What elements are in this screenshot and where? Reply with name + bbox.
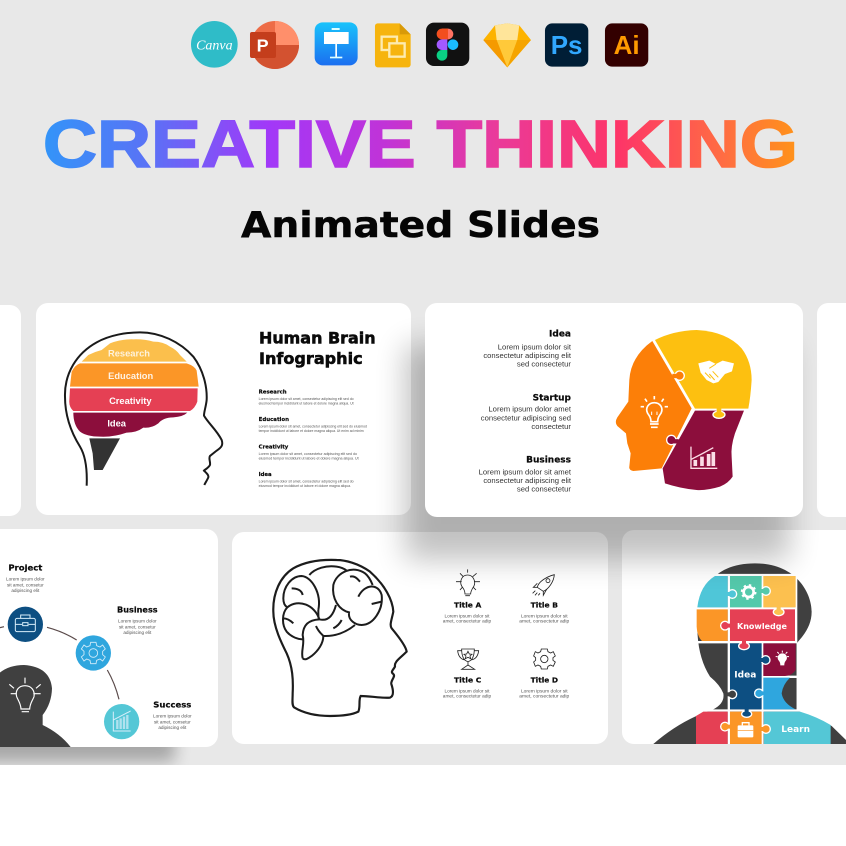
text: business: sed consectetur [517, 485, 571, 494]
text block: education: Education [259, 417, 289, 423]
text: idea: sed consectetur [517, 360, 571, 369]
piece: gear teal [730, 576, 762, 607]
text: project: Lorem ipsum dolor [6, 577, 45, 582]
text: title A: Lorem ipsum dolor sit [444, 613, 490, 618]
brain layer: creativity: Creativity [109, 396, 152, 406]
connector arrow [47, 627, 77, 640]
text block: education [259, 417, 367, 433]
dark silhouette [653, 563, 846, 744]
heading: Infographic [259, 349, 363, 368]
head outline [273, 560, 407, 716]
text: title D: Lorem ipsum dolor sit [521, 688, 569, 693]
text: project: Project [8, 564, 43, 573]
text: title C: amet, consectetur adip [443, 694, 492, 699]
text: startup: consectetur adipiscing sed [481, 413, 571, 422]
text block: education: tempor incididunt ut labore et dolore magna aliqua. Ut enim ad minim [259, 429, 364, 433]
icon: chart circle [104, 704, 139, 739]
panel: human brain infographic [36, 303, 411, 515]
panel: project business success [0, 529, 218, 747]
heading [259, 328, 376, 368]
text: project: sit amet, consetur [7, 582, 44, 587]
brain layer: education: Education [108, 371, 153, 381]
brain outline [283, 566, 382, 659]
brain layer: research: Research [108, 349, 150, 359]
icon: Canva [191, 21, 238, 68]
piece: idea: Idea [734, 671, 756, 681]
icon: PowerPoint: P [257, 36, 269, 56]
text: project [6, 564, 45, 593]
text: idea: consectetur adipiscing elit [483, 351, 572, 360]
icon: Figma [426, 23, 469, 66]
piece: yellow handshake [655, 330, 752, 409]
piece: learn: Learn [781, 725, 810, 735]
text block: research: eiusmod tempor incididunt ut labore et dolore magna aliqua. Ut [259, 401, 354, 405]
piece: learn [764, 712, 831, 744]
brain layer: creativity [69, 388, 198, 411]
brain layer: research [82, 339, 187, 362]
text block: research: Research [259, 389, 287, 395]
text: title C [443, 676, 492, 699]
text block: creativity: Lorem ipsum dolor sit amet, consectetur adipiscing elit sed do [259, 452, 357, 456]
text: business: adipiscing elit [123, 630, 152, 635]
piece: yellow [763, 576, 796, 607]
icon: gear circle [76, 635, 111, 671]
text block: research [259, 389, 354, 405]
text block: idea: eiusmod tempor incididunt ut labore et dolore magna aliqua. [259, 484, 351, 488]
icon: trophy [458, 649, 479, 669]
left edge card sliver [0, 305, 21, 516]
connector arrow [107, 670, 119, 699]
text: idea [483, 330, 572, 369]
text block: research: Lorem ipsum dolor sit amet, consectetur adipiscing elit sed do [259, 397, 354, 401]
text: success: sit amet, consetur [154, 719, 191, 724]
text: success [153, 701, 192, 730]
icon: briefcase circle [8, 607, 43, 642]
text: title B: Title B [531, 601, 558, 610]
piece: orange [697, 609, 728, 641]
text: success: adipiscing elit [158, 725, 187, 730]
icon: gear [534, 649, 555, 669]
shadow cast by the head puzzle card [405, 345, 790, 560]
text: title B [519, 601, 570, 624]
silhouette with light bulb [0, 665, 71, 747]
piece: knowledge [730, 609, 795, 641]
yellow puzzle tab [713, 407, 725, 418]
piece: shoulder red [696, 712, 728, 744]
text block: idea: Idea [259, 472, 272, 478]
text: success: Success [153, 701, 192, 710]
shadow below project card [0, 747, 184, 765]
text: title A [443, 601, 492, 624]
panel: head puzzle three pieces [425, 303, 803, 517]
panel: puzzle head [622, 530, 846, 744]
icon: Illustrator [605, 23, 648, 67]
icon: Canva: Canva [196, 38, 233, 53]
text: title C: Title C [454, 676, 481, 685]
row of software icons [191, 21, 648, 69]
text block: creativity [259, 445, 359, 460]
piece: blue neck [763, 678, 796, 709]
piece: briefcase orange [730, 712, 762, 744]
panel: outline brain head with titles [232, 532, 608, 744]
text: success: Lorem ipsum dolor [153, 714, 192, 719]
piece: maroon chart [663, 411, 744, 490]
text: idea: Lorem ipsum dolor sit [498, 342, 572, 351]
icon: PowerPoint [250, 21, 299, 69]
brain stem [89, 438, 120, 470]
text: title D: amet, consectetur adip [519, 694, 570, 699]
text: business [117, 606, 158, 635]
text: title A: amet, consectetur adip [443, 619, 492, 624]
icon: Photoshop: Ps [551, 30, 583, 60]
bottom white area [0, 765, 846, 846]
text: business: consectetur adipiscing elit [483, 476, 572, 485]
text: business: Lorem ipsum dolor sit amet [479, 467, 572, 476]
right edge card sliver [817, 303, 846, 517]
piece: idea [730, 643, 762, 709]
connector stub [0, 626, 4, 628]
text: business: Business [526, 456, 571, 466]
icon: light bulb [456, 569, 480, 596]
text block: creativity: Creativity [259, 445, 289, 451]
brain layer: idea [73, 413, 187, 437]
text: business: Lorem ipsum dolor [118, 619, 157, 624]
icon: Google Slides [375, 23, 411, 67]
text: project: adipiscing elit [11, 588, 40, 593]
text: startup [481, 393, 572, 431]
heading: Human Brain [259, 328, 376, 347]
icon: Illustrator: Ai [614, 30, 640, 60]
text: title B: Lorem ipsum dolor sit [521, 613, 569, 618]
brain layer: education [70, 363, 199, 387]
text: title A: Title A [454, 601, 482, 610]
icon: Photoshop [545, 23, 588, 67]
text block: idea [259, 472, 354, 488]
title: CREATIVE THINKING [43, 107, 798, 182]
brain layer: idea: Idea [107, 419, 127, 429]
white neck cut [796, 644, 832, 726]
subtitle: Animated Slides [241, 205, 600, 246]
head outline [65, 332, 222, 486]
icon: rocket [533, 575, 554, 595]
text: idea: Idea [549, 330, 571, 340]
text: title C: Lorem ipsum dolor sit [444, 688, 490, 693]
text: title D [519, 676, 570, 699]
text: startup: Startup [533, 393, 572, 403]
icon: Keynote [315, 22, 358, 65]
puzzle tabs [721, 587, 784, 733]
text block: education: Lorem ipsum dolor sit amet, consectetur adipiscing elit sed do eiusmod [259, 425, 367, 429]
text: title B: amet, consectetur adip [519, 619, 570, 624]
piece: knowledge: Knowledge [737, 622, 787, 631]
piece: orange bulb [616, 341, 692, 471]
text: title D: Title D [531, 676, 558, 685]
icon: Sketch [483, 23, 531, 67]
text: business: Business [117, 606, 158, 615]
piece: lightbulb maroon [763, 643, 796, 676]
text: startup: consectetur [531, 422, 571, 431]
text: startup: Lorem ipsum dolor amet [488, 405, 572, 414]
piece: cyan [697, 576, 728, 607]
text block: idea: Lorem ipsum dolor sit amet, consectetur adipiscing elit sed do [259, 480, 354, 484]
text: business: sit amet, consetur [119, 624, 156, 629]
text block: creativity: eiusmod tempor incididunt ut labore et dolore magna aliqua. Ut [259, 456, 359, 460]
puzzle grid lines [695, 575, 800, 744]
text: business [479, 456, 572, 494]
